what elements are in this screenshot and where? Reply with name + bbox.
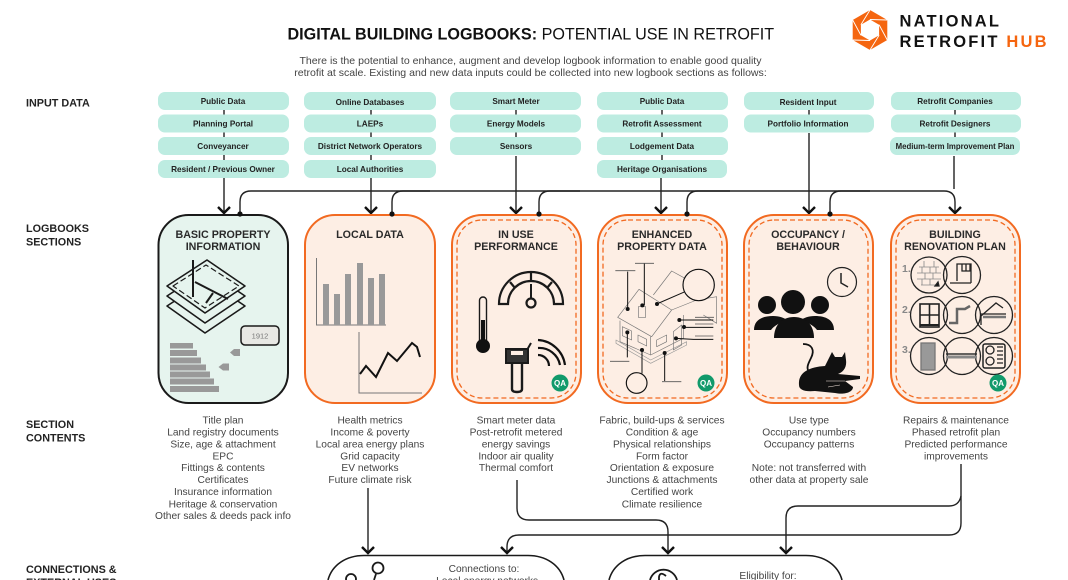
icon: network nodes <box>346 562 384 580</box>
section contents: building renovation plan: Predicted performance <box>904 440 1008 450</box>
logo: National Retrofit Hub: RETROFIT HUB <box>900 33 1049 51</box>
section contents: enhanced property data: Orientation & exposure <box>610 463 714 474</box>
step numbers <box>902 263 911 356</box>
input column 2: District Network Operators <box>318 142 423 151</box>
section contents: occupancy: other data at property sale <box>750 475 869 486</box>
step numbers: 1. <box>902 263 911 275</box>
icon: coin <box>650 570 677 580</box>
input column 2: Online Databases <box>336 98 405 107</box>
input column 1: Public Data <box>201 97 246 106</box>
panel: enhanced property data: PROPERTY DATA <box>617 241 707 253</box>
section contents: enhanced property data: Certified work <box>631 487 694 498</box>
panel: local data <box>305 215 435 403</box>
input column 3 <box>450 92 581 155</box>
row label: logbooks sections: LOGBOOKS <box>26 223 89 235</box>
input column 3: Sensors <box>500 142 533 151</box>
line chart <box>359 332 422 393</box>
panel: building renovation plan <box>891 215 1020 403</box>
panel: occupancy / behaviour: BEHAVIOUR <box>776 241 840 253</box>
panel: basic property information: INFORMATION <box>186 241 260 253</box>
connector lines from inputs to sections <box>218 133 961 213</box>
input column 1: Conveyancer <box>197 142 250 151</box>
section contents: occupancy: Note: not transferred with <box>752 463 866 474</box>
section contents: basic property information: Size, age & attachment <box>170 440 276 450</box>
section contents: enhanced property data <box>599 416 725 510</box>
section contents: local data: EV networks <box>341 463 399 474</box>
icon: layered site plan <box>167 260 245 333</box>
panel: enhanced property data: ENHANCED <box>632 229 693 241</box>
connections text: Connections to: <box>449 564 519 575</box>
logo: National Retrofit Hub: NATIONAL <box>900 12 1001 30</box>
badge: QA <box>990 374 1006 392</box>
input column 3: Energy Models <box>487 120 546 128</box>
intro text <box>294 55 767 79</box>
panel: enhanced property data <box>598 215 727 403</box>
intro text: There is the potential to enhance, augment and develop logbook information to enable good quality <box>299 55 762 67</box>
row label: section contents: CONTENTS <box>26 432 85 444</box>
input column 5 <box>744 92 874 132</box>
input column 6: Medium-term Improvement Plan <box>896 142 1015 151</box>
input column 2: LAEPs <box>357 120 384 128</box>
section contents: enhanced property data: Form factor <box>636 452 689 462</box>
section contents: enhanced property data: Condition & age <box>626 428 699 438</box>
section contents: local data <box>316 416 424 486</box>
label: year 1912 <box>241 326 279 345</box>
input column 3: Smart Meter <box>492 97 540 106</box>
input column 1: Resident / Previous Owner <box>171 165 276 174</box>
panel: building renovation plan: RENOVATION PLAN <box>904 241 1006 253</box>
input column 1: Planning Portal <box>193 120 253 128</box>
badge: QA <box>698 374 714 392</box>
panel: local data: LOCAL DATA <box>336 229 404 241</box>
section contents: in use performance <box>470 416 563 474</box>
icon: wireless signal <box>538 340 565 366</box>
input column 6: Retrofit Designers <box>920 120 991 128</box>
connections text <box>430 564 538 580</box>
section contents: basic property information: Title plan <box>203 416 243 426</box>
section contents: basic property information: Other sales & deeds pack info <box>155 511 291 522</box>
icon: group of people <box>754 290 834 338</box>
input column 4: Heritage Organisations <box>617 165 707 174</box>
section contents: occupancy: Occupancy numbers <box>762 428 856 438</box>
intro text: retrofit at scale. Existing and new data inputs could be collected into new logbook sections as follows: <box>294 67 767 79</box>
connector dots on panel tops <box>237 211 833 217</box>
section contents: local data: Grid capacity <box>340 452 401 462</box>
step numbers: 2. <box>902 304 911 316</box>
section contents: occupancy <box>750 416 869 486</box>
section contents: enhanced property data: Junctions & attachments <box>606 475 718 486</box>
section contents: building renovation plan: Phased retrofit plan <box>912 428 1000 438</box>
section contents: local data: Health metrics <box>337 416 403 426</box>
icon: cat <box>799 344 860 394</box>
section contents: in use performance: Indoor air quality <box>478 452 555 462</box>
row label: input data: INPUT DATA <box>26 98 90 110</box>
panel: building renovation plan: BUILDING <box>929 229 981 241</box>
logo: National Retrofit Hub <box>853 10 1049 51</box>
section contents: basic property information: Certificates <box>198 475 248 486</box>
input column 4: Retrofit Assessment <box>622 120 702 128</box>
label: year 1912: 1912 <box>252 332 268 340</box>
section contents: in use performance: Smart meter data <box>477 416 556 426</box>
panel: connections <box>328 556 564 580</box>
input column 5: Portfolio Information <box>768 120 848 128</box>
section contents: enhanced property data: Fabric, build-ups & services <box>599 416 725 426</box>
row label: logbooks sections <box>26 223 89 248</box>
badge: QA: QA <box>992 379 1004 388</box>
panel: basic property information: BASIC PROPERTY <box>175 229 271 241</box>
badge: QA: QA <box>554 379 566 388</box>
icon: smart meter sensor <box>506 343 531 392</box>
section contents: basic property information: Insurance information <box>174 487 272 498</box>
row label: connections and external uses: CONNECTIONS & <box>26 564 117 576</box>
row label: section contents <box>26 419 85 444</box>
section contents: basic property information: EPC <box>213 452 233 462</box>
input column 6 <box>890 92 1021 155</box>
input column 2: Local Authorities <box>337 165 404 174</box>
panel: basic property information <box>158 215 288 403</box>
section contents: basic property information: Heritage & conservation <box>169 500 277 510</box>
input column 4: Public Data <box>640 97 685 106</box>
title: DIGITAL BUILDING LOGBOOKS: POTENTIAL USE IN RETROFIT <box>288 26 774 44</box>
bar chart <box>316 258 386 325</box>
input column 4 <box>597 92 728 178</box>
section contents: occupancy: Use type <box>789 416 829 426</box>
badge: QA: QA <box>700 379 712 388</box>
panel: in use performance: PERFORMANCE <box>474 241 558 253</box>
icon: gauge <box>499 272 563 308</box>
section contents: in use performance: Post-retrofit metered <box>470 428 563 438</box>
icon: clock <box>828 268 856 296</box>
input column 4: Lodgement Data <box>630 142 695 151</box>
section contents: basic property information: Fittings & contents <box>181 463 265 474</box>
panel: occupancy / behaviour: OCCUPANCY / <box>771 229 845 241</box>
section contents: local data: Local area energy plans <box>316 440 424 450</box>
badge: QA <box>552 374 568 392</box>
section contents: building renovation plan: improvements <box>924 452 988 462</box>
section contents: local data: Future climate risk <box>328 475 413 486</box>
input column 6: Retrofit Companies <box>917 97 993 106</box>
row label: section contents: SECTION <box>26 419 74 431</box>
panel: in use performance: IN USE <box>498 229 534 241</box>
section contents: enhanced property data: Climate resilience <box>622 500 703 510</box>
section contents: local data: Income & poverty <box>330 428 411 438</box>
icon: house diagram with callouts <box>610 263 717 393</box>
panel: eligibility <box>609 556 842 580</box>
section contents: building renovation plan <box>903 416 1009 462</box>
section contents: enhanced property data: Physical relationships <box>613 440 711 450</box>
input column 1 <box>158 92 289 178</box>
icon: renovation measures <box>910 256 1012 374</box>
section contents: in use performance: Thermal comfort <box>479 463 553 474</box>
panel: occupancy / behaviour <box>744 215 873 403</box>
step numbers: 3. <box>902 344 911 356</box>
section contents: in use performance: energy savings <box>482 440 550 450</box>
icon: stepped bars <box>170 343 240 392</box>
input column 5: Resident Input <box>780 98 837 107</box>
input column 2 <box>304 92 436 178</box>
section contents: occupancy: Occupancy patterns <box>764 440 854 450</box>
section contents: basic property information: Land registry documents <box>167 428 279 438</box>
panel: in use performance <box>452 215 581 403</box>
connector lines to external uses <box>362 464 961 553</box>
icon: thermometer <box>476 297 490 353</box>
section contents: building renovation plan: Repairs & maintenance <box>903 416 1009 426</box>
section contents: basic property information <box>155 416 291 522</box>
row label: logbooks sections: SECTIONS <box>26 236 81 248</box>
